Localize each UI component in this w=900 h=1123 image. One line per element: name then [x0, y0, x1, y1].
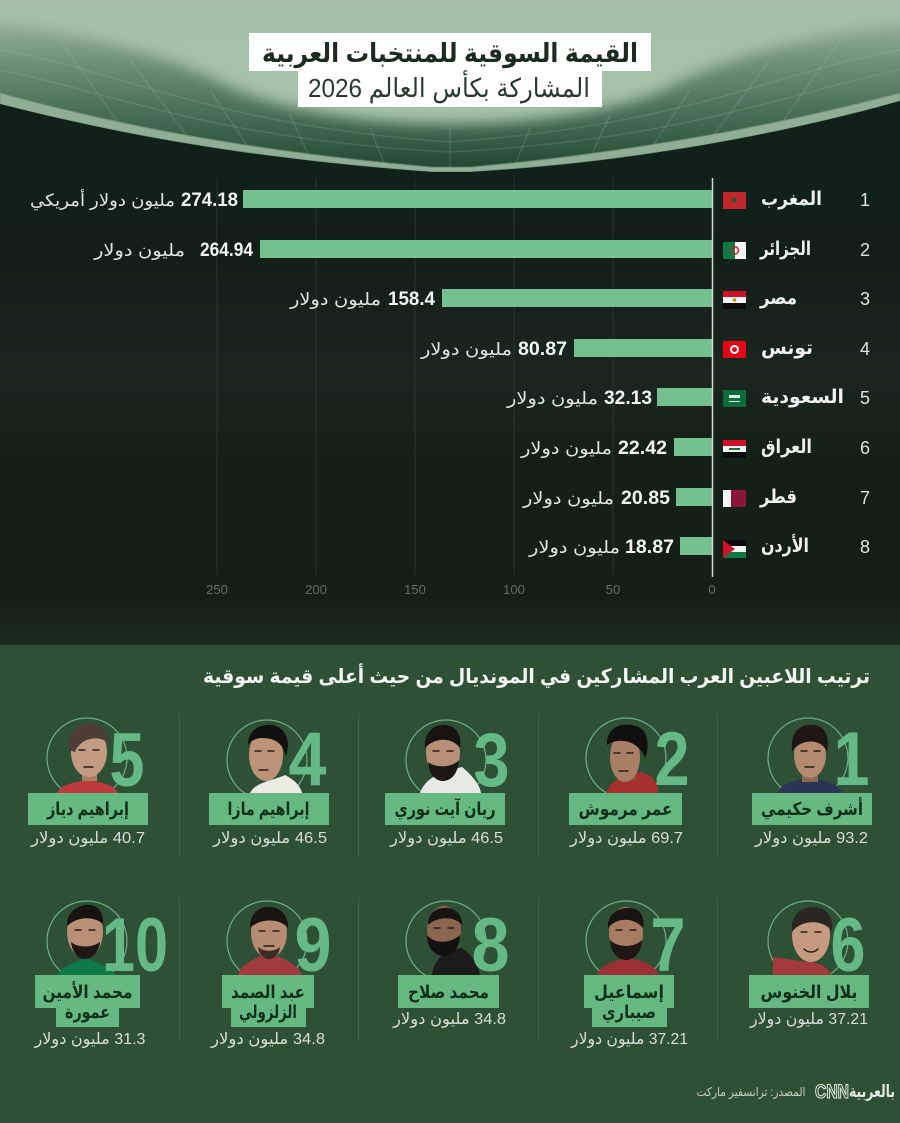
player 5: [28, 718, 148, 848]
player 3: [385, 718, 510, 848]
x axis labels: 150: [404, 582, 426, 597]
player 2: [569, 717, 690, 848]
player 8: 8: [472, 903, 510, 988]
player 2: 69.7 مليون دولار: [569, 830, 683, 848]
player 8: [392, 901, 510, 1029]
player 5: 5: [110, 718, 144, 803]
row 8 Jordan: 8: [860, 537, 870, 557]
player 5: 40.7 مليون دولار: [30, 830, 145, 848]
panel: top players: [0, 645, 900, 1123]
row 4 Tunisia: مليون دولار: [420, 340, 512, 359]
player 5: إبراهيم دياز: [46, 799, 129, 820]
row 1 Morocco: 1: [860, 190, 870, 210]
row 2 Algeria: 264.94: [200, 240, 253, 261]
player 10: [33, 901, 168, 1049]
player 1: [752, 717, 872, 848]
row 3 Egypt: 3: [860, 289, 870, 309]
x axis labels: [206, 582, 716, 597]
player 1: 93.2 مليون دولار: [754, 830, 868, 848]
row 7 Qatar: 20.85: [621, 488, 670, 509]
row 3 Egypt: [289, 288, 870, 310]
section heading: ترتيب اللاعبين العرب المشاركين في المونديال من حيث أعلى قيمة سوقية: [203, 662, 870, 689]
player 6: [749, 901, 869, 1029]
source line: المصدر: ترانسفير ماركت: [696, 1085, 806, 1100]
x axis labels: 50: [606, 582, 620, 597]
player 8: 34.8 مليون دولار: [392, 1011, 506, 1029]
row 5 Saudi Arabia: [506, 387, 870, 409]
row 8 Jordan: 18.87: [625, 537, 674, 558]
title: المشاركة بكأس العالم 2026: [308, 69, 590, 104]
player 4: إبراهيم مازا: [228, 799, 310, 820]
player 6: 6: [830, 903, 866, 988]
row 6 Iraq: [520, 437, 870, 459]
row 5 Saudi Arabia: 5: [860, 388, 870, 408]
row 4 Tunisia: 4: [860, 339, 870, 359]
row 7 Qatar: 7: [860, 488, 870, 508]
player 7: 7: [650, 903, 686, 988]
row 3 Egypt: 158.4: [388, 289, 435, 310]
x axis labels: 0: [708, 582, 716, 597]
player 3: 46.5 مليون دولار: [389, 830, 503, 848]
row 2 Algeria: الجزائر: [759, 239, 811, 260]
player 7: 37.21 مليون دولار: [570, 1031, 688, 1049]
player 10: محمد الأمين: [42, 981, 132, 1003]
row 7 Qatar: [522, 487, 870, 509]
row 5 Saudi Arabia: 32.13: [604, 388, 652, 409]
x axis labels: 250: [206, 582, 228, 597]
row 6 Iraq: مليون دولار: [520, 439, 612, 458]
player 4: 46.5 مليون دولار: [212, 830, 327, 848]
player 4: [209, 717, 329, 848]
row 5 Saudi Arabia: السعودية: [761, 387, 844, 408]
logo: CNN Arabic: CNN: [815, 1082, 849, 1103]
row 1 Morocco: المغرب: [761, 189, 822, 210]
player 3: ريان آيت نوري: [394, 797, 496, 820]
logo: CNN Arabic: [815, 1082, 895, 1103]
title: [249, 33, 651, 107]
title: القيمة السوقية للمنتخبات العربية: [262, 38, 638, 69]
player 1: 1: [834, 717, 870, 802]
player 9: الزلزولي: [239, 1002, 297, 1023]
row 4 Tunisia: 80.87: [518, 339, 567, 360]
row 3 Egypt: مصر: [759, 288, 797, 309]
row 8 Jordan: مليون دولار: [528, 538, 620, 557]
row 6 Iraq: العراق: [761, 437, 812, 458]
player 10: 31.3 مليون دولار: [33, 1031, 146, 1049]
player 1: أشرف حكيمي: [761, 797, 863, 820]
row 2 Algeria: مليون دولار: [93, 241, 185, 260]
row 6 Iraq: 22.42: [618, 438, 667, 459]
player 9: 9: [294, 903, 332, 988]
row 3 Egypt: مليون دولار: [289, 290, 381, 309]
player 9: عبد الصمد: [231, 982, 305, 1002]
player 7: إسماعيل: [594, 982, 664, 1002]
stadium background photo: [0, 0, 900, 645]
row 1 Morocco: [30, 189, 870, 211]
player 7: [570, 901, 688, 1049]
row 5 Saudi Arabia: مليون دولار: [506, 389, 598, 408]
player 7: صيباري: [602, 1002, 656, 1023]
row 8 Jordan: [528, 534, 870, 558]
row 2 Algeria: [93, 239, 870, 261]
player 10: عمورة: [65, 1002, 110, 1023]
bar chart: national team market value: [30, 178, 870, 597]
player 4: 4: [288, 717, 326, 802]
row 2 Algeria: 2: [860, 240, 870, 260]
row 4 Tunisia: تونس: [761, 338, 813, 359]
row 7 Qatar: قطر: [759, 487, 797, 508]
player 8: محمد صلاح: [408, 982, 489, 1002]
player 2: 2: [654, 717, 690, 802]
player 3: 3: [474, 718, 510, 803]
x axis labels: 100: [503, 582, 525, 597]
player 2: عمر مرموش: [578, 799, 672, 820]
x axis labels: 200: [305, 582, 327, 597]
row 8 Jordan: الأردن: [761, 534, 809, 557]
row 6 Iraq: 6: [860, 438, 870, 458]
player 9: 34.8 مليون دولار: [210, 1031, 325, 1049]
row 1 Morocco: مليون دولار أمريكي: [30, 189, 175, 211]
player 10: 10: [102, 903, 168, 988]
player 6: بلال الخنوس: [760, 982, 858, 1003]
row 7 Qatar: مليون دولار: [522, 489, 614, 508]
row 4 Tunisia: [420, 338, 870, 360]
player 9: [210, 901, 332, 1049]
row 1 Morocco: 274.18: [181, 190, 238, 211]
player 6: 37.21 مليون دولار: [749, 1011, 868, 1029]
